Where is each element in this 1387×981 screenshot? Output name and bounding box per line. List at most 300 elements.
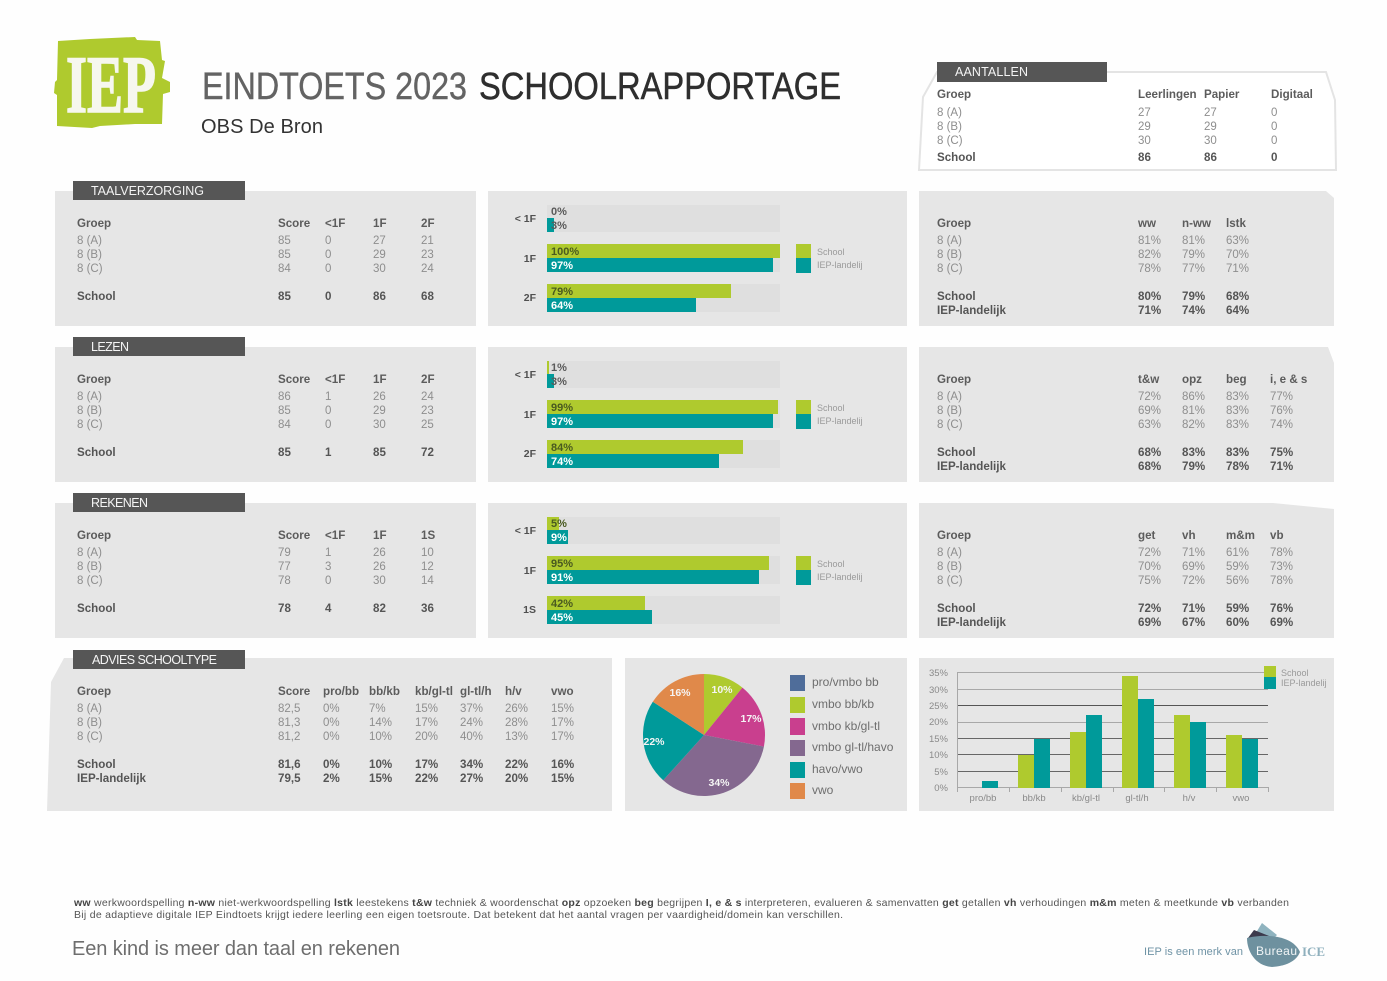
panel: advies schooltype table: 79,5 xyxy=(278,772,301,785)
panel: taalverzorging bar chart: 2F xyxy=(524,292,537,304)
panel: rekenen table: REKENEN xyxy=(91,496,148,510)
panel: lezen skills table: opz xyxy=(1182,373,1202,386)
panel: advies schooltype table: 81,3 xyxy=(278,717,300,729)
panel: rekenen table: 1S xyxy=(421,529,435,542)
panel: pie chart schooltype: vmbo gl-tl/havo xyxy=(812,740,894,754)
panel: rekenen skills table: get xyxy=(1138,529,1156,542)
panel: rekenen bar chart: 42% xyxy=(551,598,573,610)
panel: advies schooltype table: Score xyxy=(278,685,311,698)
panel: taalverzorging skills table: 79% xyxy=(1182,290,1205,303)
panel: rekenen bar chart: 1F xyxy=(524,565,537,577)
panel: lezen skills table: 63% xyxy=(1138,419,1161,431)
panel: advies schooltype table: vwo xyxy=(551,685,574,698)
panel: taalverzorging skills table: 78% xyxy=(1138,263,1161,275)
title xyxy=(202,66,841,108)
panel: column chart schooltype: 25% xyxy=(929,701,949,712)
panel: advies schooltype table: 14% xyxy=(369,717,392,729)
panel: lezen skills table: 77% xyxy=(1270,391,1293,403)
panel: lezen table: 23 xyxy=(421,405,434,417)
panel: taalverzorging skills table: IEP-landelijk xyxy=(937,304,1006,317)
panel: lezen table xyxy=(55,337,476,482)
panel: lezen skills table: 71% xyxy=(1270,460,1293,473)
panel: column chart schooltype: IEP-landelijk xyxy=(1281,678,1332,688)
panel: advies schooltype table: 24% xyxy=(460,717,483,729)
panel: taalverzorging table: 0 xyxy=(325,290,331,303)
panel: taalverzorging table: TAALVERZORGING xyxy=(91,184,204,198)
panel: rekenen table: 1F xyxy=(373,529,387,542)
panel: taalverzorging skills table: 71% xyxy=(1138,304,1161,317)
panel: rekenen skills table: vb xyxy=(1270,529,1284,542)
panel: taalverzorging table: 8 (A) xyxy=(77,235,102,247)
tagline: Een kind is meer dan taal en rekenen xyxy=(72,938,400,960)
panel: taalverzorging skills table: 82% xyxy=(1138,249,1161,261)
panel: taalverzorging skills table: 71% xyxy=(1226,263,1249,275)
panel: column chart schooltype: 0% xyxy=(934,783,949,794)
panel: advies schooltype table: 13% xyxy=(505,731,528,743)
panel: taalverzorging skills table: 77% xyxy=(1182,263,1205,275)
panel: advies schooltype table: h/v xyxy=(505,685,522,698)
panel: advies schooltype table: kb/gl-tl xyxy=(415,685,453,698)
panel: aantallen: 86 xyxy=(1204,151,1217,164)
panel: pie chart schooltype: vmbo bb/kb xyxy=(812,697,874,711)
panel: column chart schooltype: kb/gl-tl xyxy=(1072,793,1100,804)
panel: advies schooltype table: 8 (B) xyxy=(77,717,102,729)
panel: lezen bar chart: 1F xyxy=(524,409,537,421)
panel: advies schooltype table: 17% xyxy=(415,758,438,771)
panel: advies schooltype table: 15% xyxy=(551,703,574,715)
panel: lezen table: 8 (B) xyxy=(77,405,102,417)
panel: lezen table: 8 (A) xyxy=(77,391,102,403)
panel: taalverzorging table: 0 xyxy=(325,263,331,275)
panel: aantallen: 8 (C) xyxy=(937,135,963,147)
panel: taalverzorging table: 84 xyxy=(278,263,291,275)
panel: lezen table: 1 xyxy=(325,391,331,403)
logo: IEP: IEP xyxy=(66,39,156,130)
panel: taalverzorging table: 27 xyxy=(373,235,386,247)
panel: advies schooltype table: 7% xyxy=(369,703,386,715)
panel: advies schooltype table: 22% xyxy=(415,772,438,785)
panel: rekenen table: Groep xyxy=(77,529,111,542)
panel: rekenen bar chart: IEP-landelijk xyxy=(817,572,868,582)
panel: taalverzorging table xyxy=(55,181,476,326)
panel: lezen bar chart: < 1F xyxy=(515,369,537,381)
panel: column chart schooltype: 35% xyxy=(929,668,949,679)
panel: lezen table: 85 xyxy=(278,446,291,459)
panel: rekenen skills table: 8 (C) xyxy=(937,575,963,587)
panel: lezen bar chart: 3% xyxy=(551,376,567,388)
panel: rekenen bar chart: 45% xyxy=(551,612,573,624)
panel: rekenen skills table: School xyxy=(937,602,976,615)
panel: rekenen table: 36 xyxy=(421,602,434,615)
panel: taalverzorging skills table: 81% xyxy=(1182,235,1205,247)
panel: advies schooltype table: 20% xyxy=(415,731,438,743)
panel: lezen bar chart: 2F xyxy=(524,448,537,460)
panel: taalverzorging skills table: ww xyxy=(1137,217,1157,230)
panel: column chart schooltype: 10% xyxy=(929,750,949,761)
panel: aantallen: Leerlingen xyxy=(1138,88,1197,101)
panel: lezen bar chart: 99% xyxy=(551,402,573,414)
panel: lezen skills table: 83% xyxy=(1182,446,1205,459)
panel: lezen skills table: 83% xyxy=(1226,405,1249,417)
panel: rekenen table: Score xyxy=(278,529,311,542)
panel: rekenen skills table: 72% xyxy=(1182,575,1205,587)
panel: pie chart schooltype: pro/vmbo bb xyxy=(812,675,879,689)
panel: rekenen bar chart: 5% xyxy=(551,518,567,530)
panel: rekenen table: 77 xyxy=(278,561,291,573)
panel: lezen skills table: 83% xyxy=(1226,391,1249,403)
panel: rekenen skills table xyxy=(919,503,1334,638)
panel: advies schooltype table: Groep xyxy=(77,685,111,698)
panel: rekenen skills table: 8 (A) xyxy=(937,547,962,559)
panel: lezen table: 85 xyxy=(278,405,291,417)
panel: aantallen: 8 (B) xyxy=(937,121,962,133)
panel: taalverzorging table: 86 xyxy=(373,290,386,303)
panel: lezen skills table: 86% xyxy=(1182,391,1205,403)
panel: advies schooltype table: 8 (A) xyxy=(77,703,102,715)
panel: taalverzorging skills table: n-ww xyxy=(1182,217,1212,230)
panel: rekenen table: 14 xyxy=(421,575,434,587)
panel: taalverzorging skills table: 64% xyxy=(1226,304,1249,317)
panel: pie chart schooltype: vmbo kb/gl-tl xyxy=(812,719,880,733)
panel: advies schooltype table: 34% xyxy=(460,758,483,771)
panel: pie chart schooltype: 10% xyxy=(711,684,733,696)
panel: rekenen skills table: 72% xyxy=(1138,602,1161,615)
panel: rekenen table: 78 xyxy=(278,575,291,587)
panel: rekenen table: 8 (B) xyxy=(77,561,102,573)
panel: advies schooltype table: 8 (C) xyxy=(77,731,103,743)
panel: taalverzorging skills table: 68% xyxy=(1226,290,1249,303)
panel: rekenen table xyxy=(55,493,476,638)
panel: aantallen: 30 xyxy=(1138,135,1151,147)
panel: taalverzorging table: 24 xyxy=(421,263,434,275)
panel: rekenen table: 26 xyxy=(373,561,386,573)
panel: lezen table: 25 xyxy=(421,419,434,431)
panel: lezen table: 84 xyxy=(278,419,291,431)
panel: rekenen skills table: 69% xyxy=(1138,616,1161,629)
panel: lezen skills table: 74% xyxy=(1270,419,1293,431)
panel: advies schooltype table: 0% xyxy=(323,758,340,771)
panel: advies schooltype table: gl-tl/h xyxy=(460,685,492,698)
panel: lezen bar chart: 1% xyxy=(551,362,567,374)
panel: lezen bar chart: 84% xyxy=(551,442,573,454)
panel: taalverzorging skills table xyxy=(919,191,1334,326)
panel: pie chart schooltype: havo/vwo xyxy=(812,762,863,776)
panel: rekenen table: 0 xyxy=(325,575,331,587)
panel: rekenen skills table: 75% xyxy=(1138,575,1161,587)
panel: lezen skills table: 81% xyxy=(1182,405,1205,417)
panel: rekenen table: 30 xyxy=(373,575,386,587)
panel: lezen table: 29 xyxy=(373,405,386,417)
panel: lezen skills table: 82% xyxy=(1182,419,1205,431)
panel: lezen table: 1 xyxy=(325,446,332,459)
panel: advies schooltype table: 37% xyxy=(460,703,483,715)
panel: lezen table: LEZEN xyxy=(91,340,129,354)
panel: advies schooltype table: 10% xyxy=(369,731,392,743)
panel: aantallen: Papier xyxy=(1204,88,1240,101)
panel: advies schooltype table: 81,6 xyxy=(278,758,301,771)
panel: aantallen: 27 xyxy=(1138,107,1151,119)
panel: column chart schooltype: 20% xyxy=(929,717,949,728)
panel: lezen table: 72 xyxy=(421,446,434,459)
panel: aantallen: School xyxy=(937,151,976,164)
panel: rekenen table: 8 (A) xyxy=(77,547,102,559)
panel: lezen skills table: 75% xyxy=(1270,446,1293,459)
panel: column chart schooltype: pro/bb xyxy=(970,793,996,804)
panel: lezen skills table: beg xyxy=(1226,373,1247,386)
panel: lezen bar chart: School xyxy=(817,403,845,413)
panel: lezen table: 30 xyxy=(373,419,386,431)
panel: rekenen table: 12 xyxy=(421,561,434,573)
panel: rekenen table: 10 xyxy=(421,547,434,559)
panel: taalverzorging table: 0 xyxy=(325,249,331,261)
panel: taalverzorging table: Score xyxy=(278,217,311,230)
panel: pie chart schooltype: 34% xyxy=(708,777,730,789)
panel: rekenen skills table: 69% xyxy=(1270,616,1293,629)
title: SCHOOLRAPPORTAGE xyxy=(479,66,841,108)
panel: rekenen skills table: vh xyxy=(1182,529,1196,542)
panel: rekenen table: 8 (C) xyxy=(77,575,103,587)
panel: rekenen skills table: 59% xyxy=(1226,602,1249,615)
panel: lezen skills table: 8 (B) xyxy=(937,405,962,417)
panel: rekenen bar chart: 1S xyxy=(523,604,536,616)
panel: lezen skills table: i, e & s xyxy=(1270,373,1307,386)
panel: advies schooltype table: 16% xyxy=(551,758,574,771)
panel: rekenen skills table: 60% xyxy=(1226,616,1249,629)
panel: rekenen table: School xyxy=(77,602,116,615)
panel: taalverzorging skills table: 63% xyxy=(1226,235,1249,247)
panel: column chart schooltype xyxy=(919,658,1334,811)
panel: lezen table: <1F xyxy=(325,373,345,386)
brand: Bureau ICE: Bureau xyxy=(1256,944,1297,958)
panel: lezen skills table: 68% xyxy=(1138,446,1161,459)
panel: taalverzorging table: 1F xyxy=(373,217,387,230)
panel: rekenen bar chart: 95% xyxy=(551,558,573,570)
panel: rekenen skills table: 56% xyxy=(1226,575,1249,587)
panel: lezen bar chart: 97% xyxy=(551,416,573,428)
panel: lezen bar chart: IEP-landelijk xyxy=(817,416,868,426)
panel: taalverzorging table: 29 xyxy=(373,249,386,261)
panel: taalverzorging bar chart: 100% xyxy=(551,246,579,258)
panel: advies schooltype table: pro/bb xyxy=(323,685,359,698)
panel: taalverzorging table: Groep xyxy=(77,217,111,230)
panel: taalverzorging table: 68 xyxy=(421,290,434,303)
panel: lezen skills table: 83% xyxy=(1226,446,1249,459)
panel: lezen table: School xyxy=(77,446,116,459)
panel: aantallen: 0 xyxy=(1271,121,1277,133)
panel: aantallen: Groep xyxy=(937,88,971,101)
panel: taalverzorging table: 21 xyxy=(421,235,434,247)
panel: rekenen skills table: 78% xyxy=(1270,547,1293,559)
panel: rekenen skills table: 73% xyxy=(1270,561,1293,573)
panel: rekenen bar chart: School xyxy=(817,559,845,569)
panel: aantallen: 8 (A) xyxy=(937,107,962,119)
panel: rekenen bar chart: 9% xyxy=(551,532,567,544)
panel: column chart schooltype: 30% xyxy=(929,685,949,696)
panel: taalverzorging bar chart xyxy=(488,191,907,326)
panel: taalverzorging table: 85 xyxy=(278,249,291,261)
panel: lezen skills table: 8 (A) xyxy=(937,391,962,403)
panel: lezen bar chart: 74% xyxy=(551,456,573,468)
footnote: explanation: Bij de adaptieve digitale IEP Eindtoets krijgt iedere leerling een eigen toetsroute. Dat betekent dat het aantal vragen per vaardigheid/domein kan verschillen. xyxy=(74,909,843,921)
panel: advies schooltype table: 0% xyxy=(323,731,340,743)
panel: lezen skills table: 78% xyxy=(1226,460,1249,473)
panel: taalverzorging bar chart: IEP-landelijk xyxy=(817,260,868,270)
panel: rekenen skills table: 71% xyxy=(1182,602,1205,615)
panel: advies schooltype table: 0% xyxy=(323,703,340,715)
panel: advies schooltype table: ADVIES SCHOOLTYPE xyxy=(92,653,217,667)
panel: advies schooltype table: 17% xyxy=(551,731,574,743)
panel: rekenen table: <1F xyxy=(325,529,345,542)
panel: rekenen skills table: m&m xyxy=(1226,529,1255,542)
title: EINDTOETS 2023 xyxy=(202,66,467,108)
panel: rekenen table: 1 xyxy=(325,547,331,559)
panel: taalverzorging table: 2F xyxy=(421,217,435,230)
panel: lezen table: 86 xyxy=(278,391,291,403)
panel: taalverzorging skills table: 80% xyxy=(1138,290,1161,303)
panel: taalverzorging table: School xyxy=(77,290,116,303)
panel: taalverzorging table: <1F xyxy=(325,217,345,230)
panel: aantallen xyxy=(919,62,1336,170)
panel: advies schooltype table: 0% xyxy=(323,717,340,729)
panel: taalverzorging skills table: 8 (C) xyxy=(937,263,963,275)
panel: taalverzorging bar chart: 0% xyxy=(551,206,567,218)
panel: taalverzorging skills table: lstk xyxy=(1226,217,1247,230)
panel: pie chart schooltype: 22% xyxy=(643,736,665,748)
panel: advies schooltype table: 22% xyxy=(505,758,528,771)
panel: rekenen skills table: 76% xyxy=(1270,602,1293,615)
panel: rekenen bar chart: 91% xyxy=(551,572,573,584)
panel: rekenen table: 82 xyxy=(373,602,386,615)
panel: advies schooltype table: 15% xyxy=(551,772,574,785)
panel: lezen table: 1F xyxy=(373,373,387,386)
panel: taalverzorging bar chart: 1F xyxy=(524,253,537,265)
panel: advies schooltype table: 2% xyxy=(323,772,340,785)
panel: lezen table: 0 xyxy=(325,419,331,431)
logo: IEP xyxy=(54,37,170,130)
panel: lezen skills table: 8 (C) xyxy=(937,419,963,431)
panel: taalverzorging skills table: 79% xyxy=(1182,249,1205,261)
panel: lezen table: 2F xyxy=(421,373,435,386)
panel: taalverzorging table: 0 xyxy=(325,235,331,247)
panel: pie chart schooltype: 17% xyxy=(740,713,762,725)
panel: taalverzorging table: 8 (B) xyxy=(77,249,102,261)
panel: rekenen skills table: 67% xyxy=(1182,616,1205,629)
panel: lezen skills table: 79% xyxy=(1182,460,1205,473)
panel: rekenen skills table: Groep xyxy=(937,529,971,542)
panel: advies schooltype table: 10% xyxy=(369,758,392,771)
panel: rekenen skills table: 61% xyxy=(1226,547,1249,559)
panel: advies schooltype table: 82,5 xyxy=(278,703,300,715)
panel: lezen skills table: 72% xyxy=(1138,391,1161,403)
panel: rekenen table: 78 xyxy=(278,602,291,615)
panel: lezen bar chart xyxy=(488,347,907,482)
panel: lezen skills table: 83% xyxy=(1226,419,1249,431)
panel: column chart schooltype: 5% xyxy=(934,767,949,778)
panel: advies schooltype table xyxy=(47,650,612,811)
panel: advies schooltype table: 15% xyxy=(369,772,392,785)
panel: advies schooltype table: 17% xyxy=(415,717,438,729)
panel: taalverzorging skills table: 8 (A) xyxy=(937,235,962,247)
panel: taalverzorging bar chart: 97% xyxy=(551,260,573,272)
panel: lezen table: 26 xyxy=(373,391,386,403)
panel: lezen table: 0 xyxy=(325,405,331,417)
panel: lezen skills table xyxy=(919,347,1334,482)
panel: taalverzorging skills table: 74% xyxy=(1182,304,1205,317)
panel: lezen table: 8 (C) xyxy=(77,419,103,431)
panel: column chart schooltype: 15% xyxy=(929,734,949,745)
panel: lezen table: Groep xyxy=(77,373,111,386)
panel: aantallen: 29 xyxy=(1204,121,1217,133)
panel: rekenen skills table: IEP-landelijk xyxy=(937,616,1006,629)
panel: column chart schooltype: h/v xyxy=(1183,793,1196,804)
panel: taalverzorging table: 85 xyxy=(278,235,291,247)
panel: advies schooltype table: 28% xyxy=(505,717,528,729)
panel: aantallen: 29 xyxy=(1138,121,1151,133)
panel: rekenen bar chart xyxy=(488,503,907,638)
panel: aantallen: 27 xyxy=(1204,107,1217,119)
panel: column chart schooltype: School xyxy=(1281,668,1309,678)
panel: advies schooltype table: 26% xyxy=(505,703,528,715)
panel: taalverzorging skills table: 70% xyxy=(1226,249,1249,261)
panel: advies schooltype table: 17% xyxy=(551,717,574,729)
panel: taalverzorging table: 23 xyxy=(421,249,434,261)
panel: advies schooltype table: bb/kb xyxy=(369,685,400,698)
panel: advies schooltype table: School xyxy=(77,758,116,771)
panel: advies schooltype table: 40% xyxy=(460,731,483,743)
panel: pie chart schooltype xyxy=(625,658,907,811)
footnote: abbreviations: ww werkwoordspelling n-ww niet-werkwoordspelling lstk leestekens t&w techniek & woordenschat opz opzoeken beg begrijpen I, e & s interpreteren, evalueren & samenvatten get getallen vh verhoudingen m&m meten & meetkunde vb verbanden xyxy=(73,897,1289,909)
panel: aantallen: 0 xyxy=(1271,107,1277,119)
panel: taalverzorging table: 85 xyxy=(278,290,291,303)
panel: taalverzorging bar chart: 3% xyxy=(551,220,567,232)
panel: rekenen skills table: 71% xyxy=(1182,547,1205,559)
brand: Bureau ICE xyxy=(1144,923,1325,967)
panel: rekenen bar chart: < 1F xyxy=(515,525,537,537)
panel: taalverzorging skills table: 81% xyxy=(1138,235,1161,247)
panel: taalverzorging bar chart: < 1F xyxy=(515,213,537,225)
panel: lezen skills table: Groep xyxy=(937,373,971,386)
panel: rekenen table: 26 xyxy=(373,547,386,559)
panel: lezen skills table: School xyxy=(937,446,976,459)
panel: rekenen table: 3 xyxy=(325,561,331,573)
subtitle: school name: OBS De Bron xyxy=(201,116,323,138)
panel: taalverzorging skills table: Groep xyxy=(937,217,971,230)
panel: lezen table: 24 xyxy=(421,391,434,403)
panel: advies schooltype table: 15% xyxy=(415,703,438,715)
panel: taalverzorging skills table: School xyxy=(937,290,976,303)
panel: rekenen skills table: 8 (B) xyxy=(937,561,962,573)
panel: lezen skills table: 69% xyxy=(1138,405,1161,417)
panel: rekenen table: 4 xyxy=(325,602,332,615)
panel: advies schooltype table: IEP-landelijk xyxy=(77,772,146,785)
panel: taalverzorging bar chart: School xyxy=(817,247,845,257)
panel: lezen skills table: 68% xyxy=(1138,460,1161,473)
panel: aantallen: 86 xyxy=(1138,151,1151,164)
panel: advies schooltype table: 81,2 xyxy=(278,731,300,743)
panel: aantallen: 0 xyxy=(1271,135,1277,147)
panel: pie chart schooltype: 16% xyxy=(669,687,691,699)
panel: aantallen: 0 xyxy=(1271,151,1277,164)
panel: rekenen skills table: 59% xyxy=(1226,561,1249,573)
panel: aantallen: Digitaal xyxy=(1271,88,1313,101)
panel: column chart schooltype: gl-tl/h xyxy=(1125,793,1149,804)
panel: taalverzorging table: 30 xyxy=(373,263,386,275)
panel: rekenen skills table: 72% xyxy=(1138,547,1161,559)
panel: pie chart schooltype: vwo xyxy=(812,783,834,797)
panel: rekenen skills table: 78% xyxy=(1270,575,1293,587)
panel: aantallen: 30 xyxy=(1204,135,1217,147)
panel: lezen table: 85 xyxy=(373,446,386,459)
